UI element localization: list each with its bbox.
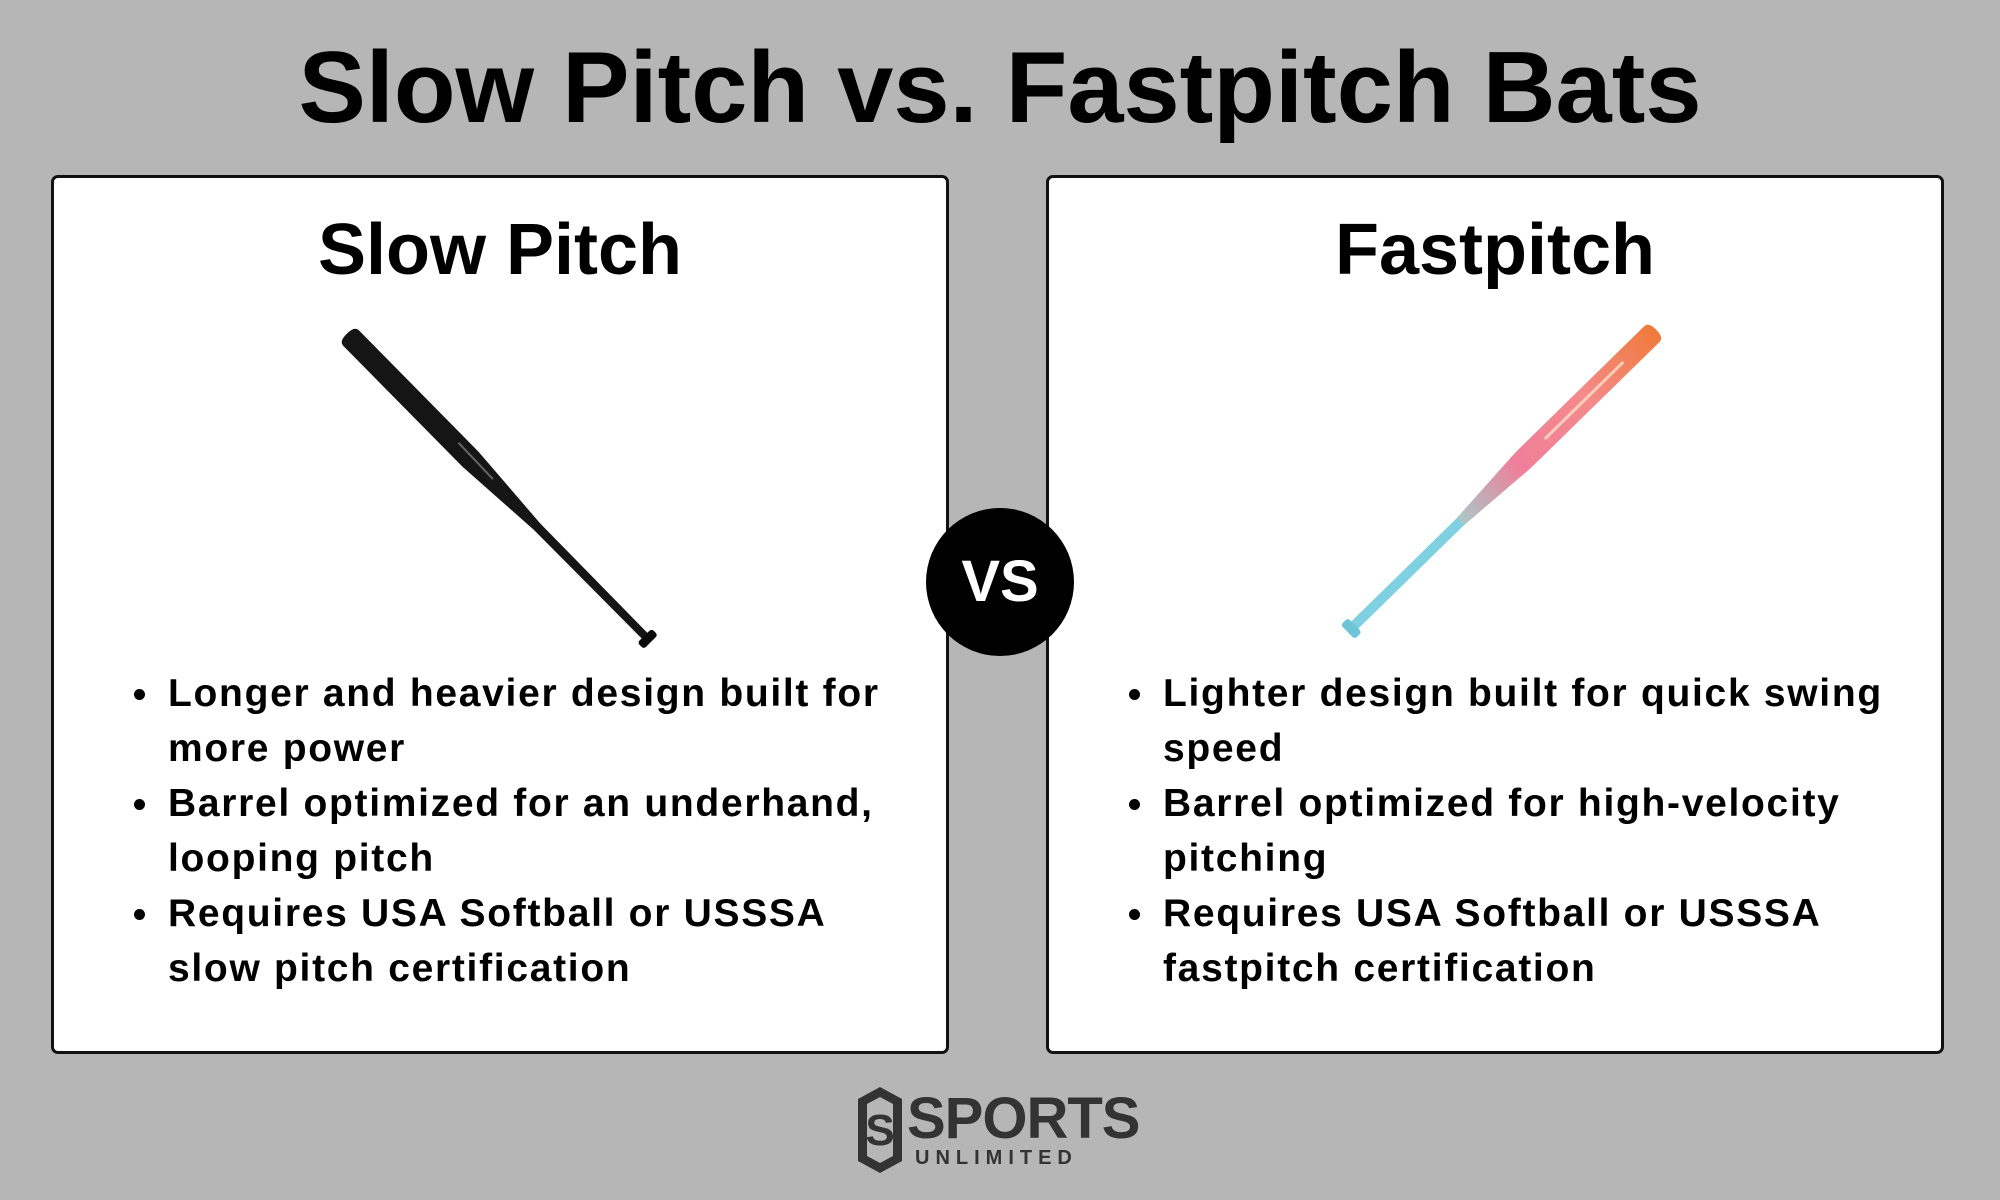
icon: shield — [858, 1087, 902, 1173]
bullets: slow pitch: slow pitch certification — [168, 947, 631, 990]
bullets: slow pitch: Requires USA Softball or USSSA — [168, 892, 826, 935]
panel: slow pitch — [51, 175, 949, 1054]
bullets: slow pitch — [134, 672, 880, 990]
bullets: fastpitch: fastpitch certification — [1163, 947, 1596, 990]
logo: sports unlimited — [858, 1086, 1140, 1173]
bullets: fastpitch: Lighter design built for quick swing — [1163, 672, 1883, 715]
bullets: fastpitch: Requires USA Softball or USSSA — [1163, 892, 1822, 935]
bullets: fastpitch: Barrel optimized for high-velocity — [1163, 782, 1841, 825]
bullets: fastpitch: speed — [1163, 727, 1284, 770]
bullets: slow pitch: Longer and heavier design built for — [168, 672, 880, 715]
logo: sports unlimited: UNLIMITED — [915, 1147, 1078, 1169]
heading: slow pitch: Slow Pitch — [318, 210, 682, 290]
logo: sports unlimited: SPORTS — [907, 1086, 1140, 1151]
icon: black slow pitch bat — [339, 326, 659, 650]
vs badge: VS — [961, 549, 1039, 614]
vs badge — [926, 508, 1074, 656]
icon: pink fastpitch bat — [1340, 322, 1664, 640]
bullets: slow pitch: more power — [168, 727, 406, 770]
bullets: fastpitch: pitching — [1163, 837, 1328, 880]
title: Slow Pitch vs. Fastpitch Bats — [298, 32, 1702, 144]
bullets: fastpitch — [1129, 672, 1883, 990]
bullets: slow pitch: Barrel optimized for an underhand, — [168, 782, 874, 825]
icon: shield: S — [865, 1106, 895, 1155]
panel: fastpitch — [1046, 175, 1944, 1054]
heading: fastpitch: Fastpitch — [1335, 210, 1655, 290]
bullets: slow pitch: looping pitch — [168, 837, 435, 880]
